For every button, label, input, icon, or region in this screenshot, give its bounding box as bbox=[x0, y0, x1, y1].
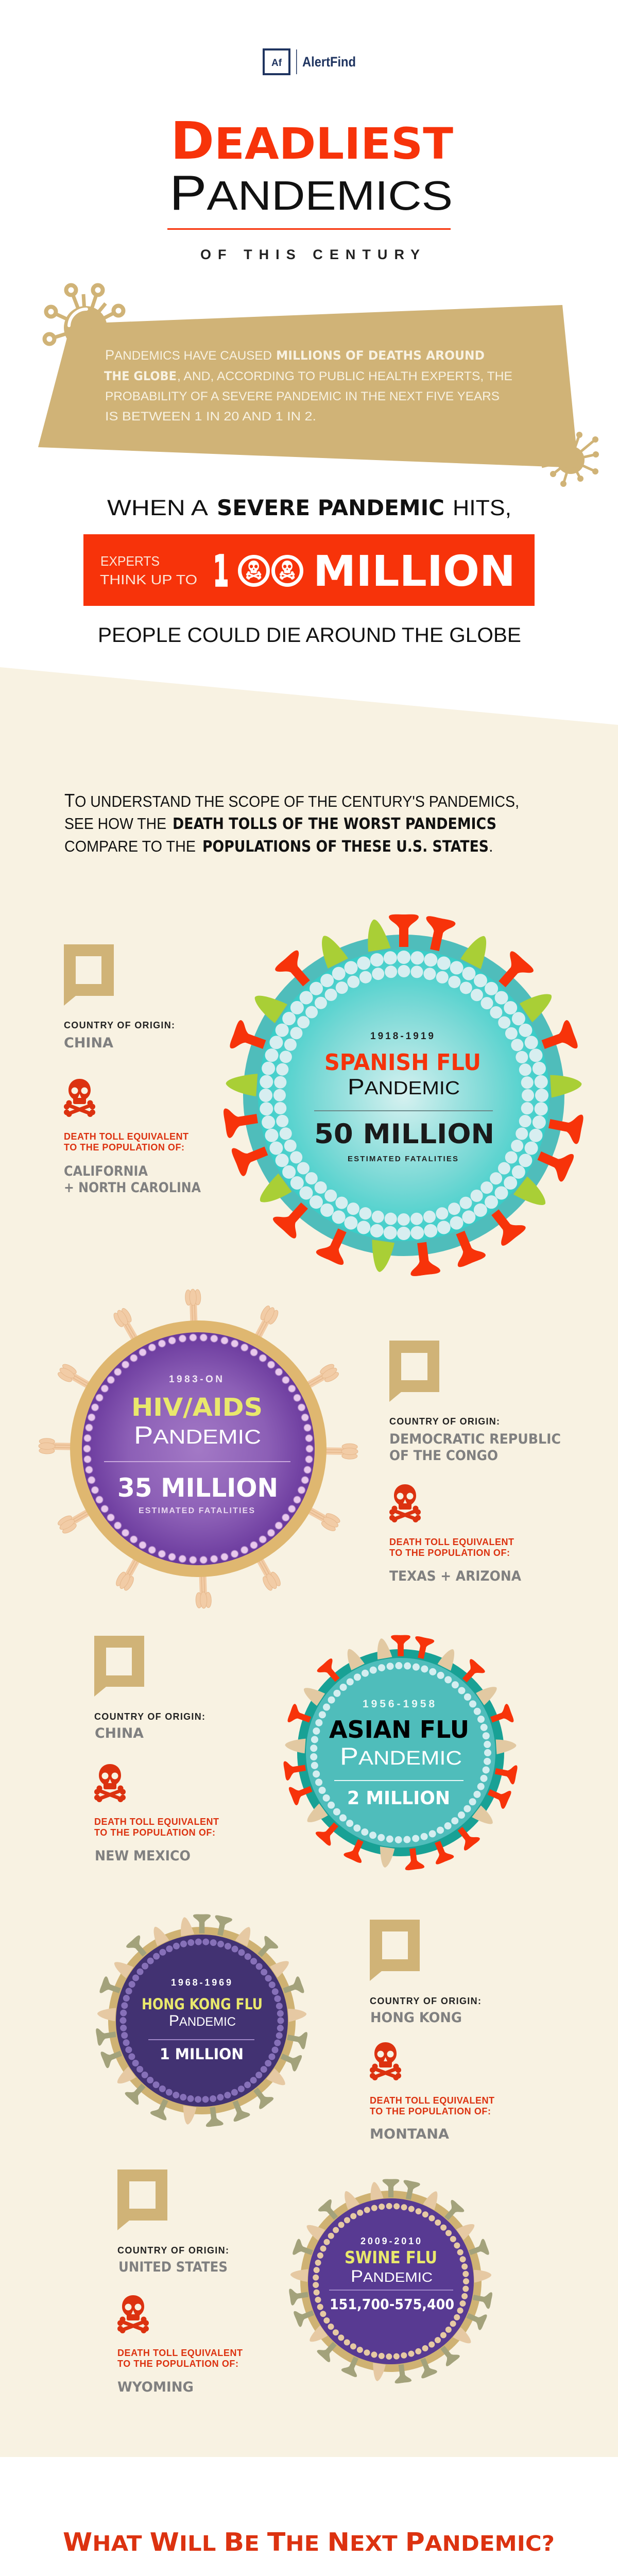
tan banner bbox=[38, 305, 578, 468]
death toll equivalent: DEATH TOLL EQUIVALENT bbox=[94, 1817, 219, 1827]
text: compare intro: POPULATIONS OF THESE U.S. STATES bbox=[202, 838, 489, 856]
icon: speech bubble bbox=[94, 1636, 144, 1697]
callout: 100 million bbox=[83, 495, 535, 647]
chart: Hong Kong flu virus bbox=[95, 1914, 308, 2127]
red banner bbox=[83, 534, 535, 606]
icon: speech bubble bbox=[370, 1920, 420, 1981]
number: 100 bbox=[213, 547, 302, 596]
country of origin: COUNTRY OF ORIGIN: bbox=[370, 1996, 481, 2006]
intro text: IS BETWEEN 1 IN 20 AND 1 IN 2. bbox=[105, 410, 316, 423]
chart: HIV/AIDS virus bbox=[39, 1289, 358, 1608]
chart: Swine flu virus bbox=[288, 2179, 493, 2384]
death toll equivalent: TO THE POPULATION OF: bbox=[370, 2106, 491, 2116]
virus text bbox=[104, 1374, 290, 1515]
virus text: PANDEMIC bbox=[134, 1422, 261, 1449]
virus text: PANDEMIC bbox=[348, 1074, 460, 1099]
icon: speech bubble bbox=[117, 2170, 167, 2230]
heading: Pandemics: PANDEMICS bbox=[169, 165, 453, 221]
panel: Asian flu details bbox=[94, 1636, 219, 1864]
logo: AlertFind bbox=[264, 49, 356, 74]
intro text: , AND, ACCORDING TO PUBLIC HEALTH EXPERTS, THE bbox=[177, 369, 512, 383]
panel: Swine flu details bbox=[117, 2170, 243, 2395]
country of origin: DEMOCRATIC REPUBLIC bbox=[389, 1431, 561, 1447]
logo: AlertFind: AlertFind bbox=[302, 54, 356, 70]
death toll equivalent: TO THE POPULATION OF: bbox=[389, 1548, 510, 1558]
virus text: 2 MILLION bbox=[347, 1788, 450, 1809]
death toll equivalent: NEW MEXICO bbox=[95, 1848, 191, 1864]
logo: AlertFind: Af bbox=[271, 58, 282, 69]
icon: skull bbox=[117, 2295, 149, 2333]
intro text: PANDEMICS HAVE CAUSED bbox=[105, 347, 272, 363]
country of origin bbox=[94, 1711, 205, 1741]
text: people could die: PEOPLE COULD DIE AROUND THE GLOBE bbox=[98, 624, 521, 647]
death toll equivalent bbox=[389, 1537, 521, 1584]
panel: Hong Kong flu details bbox=[370, 1920, 494, 2142]
text: compare intro: TO UNDERSTAND THE SCOPE OF THE CENTURY'S PANDEMICS, bbox=[64, 790, 519, 811]
country of origin: UNITED STATES bbox=[118, 2259, 228, 2275]
title block bbox=[167, 111, 453, 262]
death toll equivalent: TO THE POPULATION OF: bbox=[117, 2359, 238, 2369]
virus text: ASIAN FLU bbox=[329, 1716, 469, 1743]
icon: speech bubble bbox=[64, 944, 114, 1006]
virus text: PANDEMIC bbox=[169, 2012, 236, 2029]
country of origin bbox=[64, 1020, 175, 1051]
icon: skull bbox=[64, 1079, 95, 1117]
text: experts think up to: EXPERTS bbox=[100, 553, 160, 569]
chart: Asian flu virus bbox=[283, 1635, 518, 1871]
icon: skull bbox=[94, 1764, 126, 1802]
country of origin: COUNTRY OF ORIGIN: bbox=[389, 1416, 500, 1427]
country of origin bbox=[117, 2245, 229, 2275]
text: when a severe pandemic hits bbox=[107, 495, 511, 520]
text: compare intro: . bbox=[489, 837, 493, 855]
heading: Deadliest: DEADLIEST bbox=[170, 111, 453, 171]
panel: intro callout bbox=[38, 285, 599, 487]
icon: virus bottom right bbox=[542, 432, 599, 487]
intro text bbox=[104, 347, 512, 423]
virus text: PANDEMIC bbox=[340, 1742, 462, 1770]
country of origin: HONG KONG bbox=[370, 2010, 462, 2026]
text: when a severe pandemic hits: SEVERE PANDEMIC bbox=[217, 495, 444, 520]
background: cream section pandemics bbox=[0, 667, 618, 2457]
icon: virus top left bbox=[44, 285, 124, 349]
virus text: ESTIMATED FATALITIES bbox=[139, 1506, 254, 1515]
death toll equivalent bbox=[64, 1131, 201, 1196]
text: when a severe pandemic hits: WHEN A bbox=[107, 496, 208, 520]
text: when a severe pandemic hits: HITS, bbox=[453, 496, 511, 520]
virus text: 1918-1919 bbox=[370, 1031, 434, 1042]
death toll equivalent: WYOMING bbox=[117, 2379, 194, 2395]
text: experts think up to: THINK UP TO bbox=[100, 572, 197, 587]
heading: WHAT WILL BE THE NEXT PANDEMIC? bbox=[63, 2528, 555, 2557]
intro text: THE GLOBE bbox=[104, 369, 177, 383]
virus text: 1968-1969 bbox=[171, 1977, 231, 1988]
icon: skull bbox=[370, 2042, 401, 2080]
virus text bbox=[329, 2236, 454, 2313]
number: 100: 1 bbox=[213, 547, 229, 596]
virus text: SPANISH FLU bbox=[324, 1049, 481, 1076]
death toll equivalent: DEATH TOLL EQUIVALENT bbox=[64, 1131, 188, 1142]
virus text: 35 MILLION bbox=[117, 1473, 278, 1503]
chart: Spanish flu virus bbox=[223, 914, 584, 1277]
country of origin: CHINA bbox=[64, 1035, 113, 1051]
subheading: OF THIS CENTURY bbox=[200, 247, 420, 262]
death toll equivalent: TO THE POPULATION OF: bbox=[94, 1827, 215, 1838]
text: compare intro: COMPARE TO THE bbox=[64, 837, 196, 855]
death toll equivalent: DEATH TOLL EQUIVALENT bbox=[117, 2348, 243, 2358]
virus text: 151,700-575,400 bbox=[330, 2296, 454, 2313]
country of origin bbox=[370, 1996, 481, 2026]
death toll equivalent: + NORTH CAROLINA bbox=[64, 1180, 201, 1196]
death toll equivalent: TO THE POPULATION OF: bbox=[64, 1142, 184, 1153]
country of origin: COUNTRY OF ORIGIN: bbox=[117, 2245, 229, 2256]
virus text: 1 MILLION bbox=[160, 2045, 244, 2063]
virus text: 1983-ON bbox=[169, 1374, 222, 1385]
country of origin: COUNTRY OF ORIGIN: bbox=[64, 1020, 175, 1030]
intro text: PROBABILITY OF A SEVERE PANDEMIC IN THE NEXT FIVE YEARS bbox=[105, 389, 500, 403]
virus text: SWINE FLU bbox=[345, 2247, 437, 2267]
virus text bbox=[329, 1698, 469, 1809]
death toll equivalent: MONTANA bbox=[370, 2126, 449, 2142]
death toll equivalent: DEATH TOLL EQUIVALENT bbox=[370, 2095, 494, 2106]
country of origin: OF THE CONGO bbox=[389, 1448, 498, 1464]
virus text: ESTIMATED FATALITIES bbox=[348, 1155, 458, 1163]
virus text: PANDEMIC bbox=[351, 2267, 433, 2285]
death toll equivalent bbox=[94, 1817, 219, 1864]
text: compare intro: SEE HOW THE bbox=[64, 815, 166, 833]
virus text: HIV/AIDS bbox=[131, 1393, 263, 1422]
virus text bbox=[142, 1977, 263, 2063]
death toll equivalent: CALIFORNIA bbox=[64, 1163, 148, 1179]
panel: Spanish flu details bbox=[64, 944, 201, 1196]
country of origin: CHINA bbox=[95, 1725, 144, 1741]
panel: HIV/AIDS details bbox=[389, 1341, 561, 1584]
text: experts think up to bbox=[100, 553, 197, 587]
death toll equivalent: TEXAS + ARIZONA bbox=[389, 1568, 521, 1584]
virus text: 1956-1958 bbox=[363, 1698, 435, 1710]
death toll equivalent bbox=[117, 2348, 243, 2395]
virus text: 50 MILLION bbox=[314, 1118, 494, 1150]
death toll equivalent: DEATH TOLL EQUIVALENT bbox=[389, 1537, 514, 1547]
intro text: MILLIONS OF DEATHS AROUND bbox=[276, 348, 485, 363]
virus text: 2009-2010 bbox=[360, 2236, 421, 2246]
text: compare intro: DEATH TOLLS OF THE WORST PANDEMICS bbox=[173, 815, 496, 833]
text: million: MILLION bbox=[313, 547, 516, 596]
virus text bbox=[314, 1031, 494, 1163]
death toll equivalent bbox=[370, 2095, 494, 2142]
icon: skull bbox=[389, 1484, 421, 1522]
country of origin: COUNTRY OF ORIGIN: bbox=[94, 1711, 205, 1722]
icon: speech bubble bbox=[389, 1341, 439, 1402]
country of origin bbox=[389, 1416, 561, 1464]
virus text: HONG KONG FLU bbox=[142, 1995, 263, 2013]
text: compare intro bbox=[64, 790, 519, 856]
